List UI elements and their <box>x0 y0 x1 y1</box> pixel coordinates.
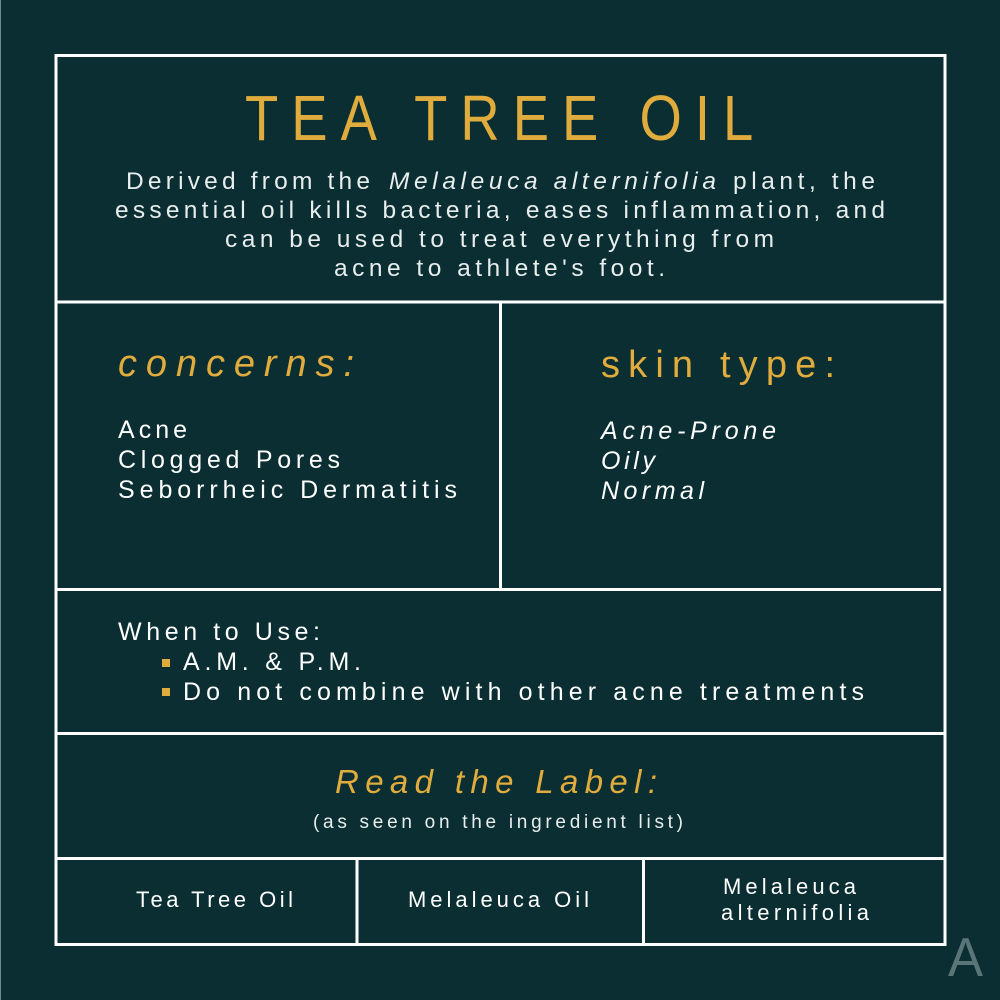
label name: Melaleuca alternifolia <box>721 874 870 925</box>
label name: Melaleuca Oil: Melaleuca Oil <box>408 887 589 912</box>
skin type list: Normal <box>601 477 705 505</box>
when to use heading: When to Use: <box>118 618 320 646</box>
skin type list: Acne-Prone <box>599 417 776 445</box>
panel: concerns <box>118 343 457 504</box>
label name: Melaleuca alternifolia: alternifolia <box>721 900 870 925</box>
skin type list <box>599 417 776 505</box>
title: TEA TREE OIL <box>245 82 753 154</box>
bullet: do not combine: Do not combine with other acne treatments <box>183 678 864 706</box>
label name: Tea Tree Oil: Tea Tree Oil <box>136 887 293 912</box>
table frame <box>54 54 946 946</box>
panel: skin type <box>599 344 835 505</box>
read the label heading: Read the Label: <box>335 763 657 800</box>
concerns heading: concerns: <box>118 343 354 385</box>
label name: Melaleuca alternifolia: Melaleuca <box>723 874 857 899</box>
description: can be used to treat everything from <box>225 226 774 253</box>
description: plant, the <box>733 168 875 195</box>
watermark logo letter: A <box>948 926 983 988</box>
skin type heading: skin type: <box>601 344 835 386</box>
concerns list: Clogged Pores <box>118 446 340 474</box>
description: Melaleuca alternifolia <box>389 168 716 195</box>
skin type list: Oily <box>601 447 656 475</box>
description <box>115 168 885 282</box>
read the label subtitle: (as seen on the ingredient list) <box>313 812 683 833</box>
panel: when to use <box>118 618 864 706</box>
description: essential oil kills bacteria, eases inflammation, and <box>115 197 885 224</box>
concerns list: Acne <box>118 416 187 444</box>
concerns list <box>118 416 457 504</box>
description: acne to athlete's foot. <box>334 255 665 282</box>
description: Derived from the <box>126 168 370 195</box>
bullet: A.M. and P.M.: A.M. & P.M. <box>183 648 361 676</box>
concerns list: Seborrheic Dermatitis <box>118 476 457 504</box>
